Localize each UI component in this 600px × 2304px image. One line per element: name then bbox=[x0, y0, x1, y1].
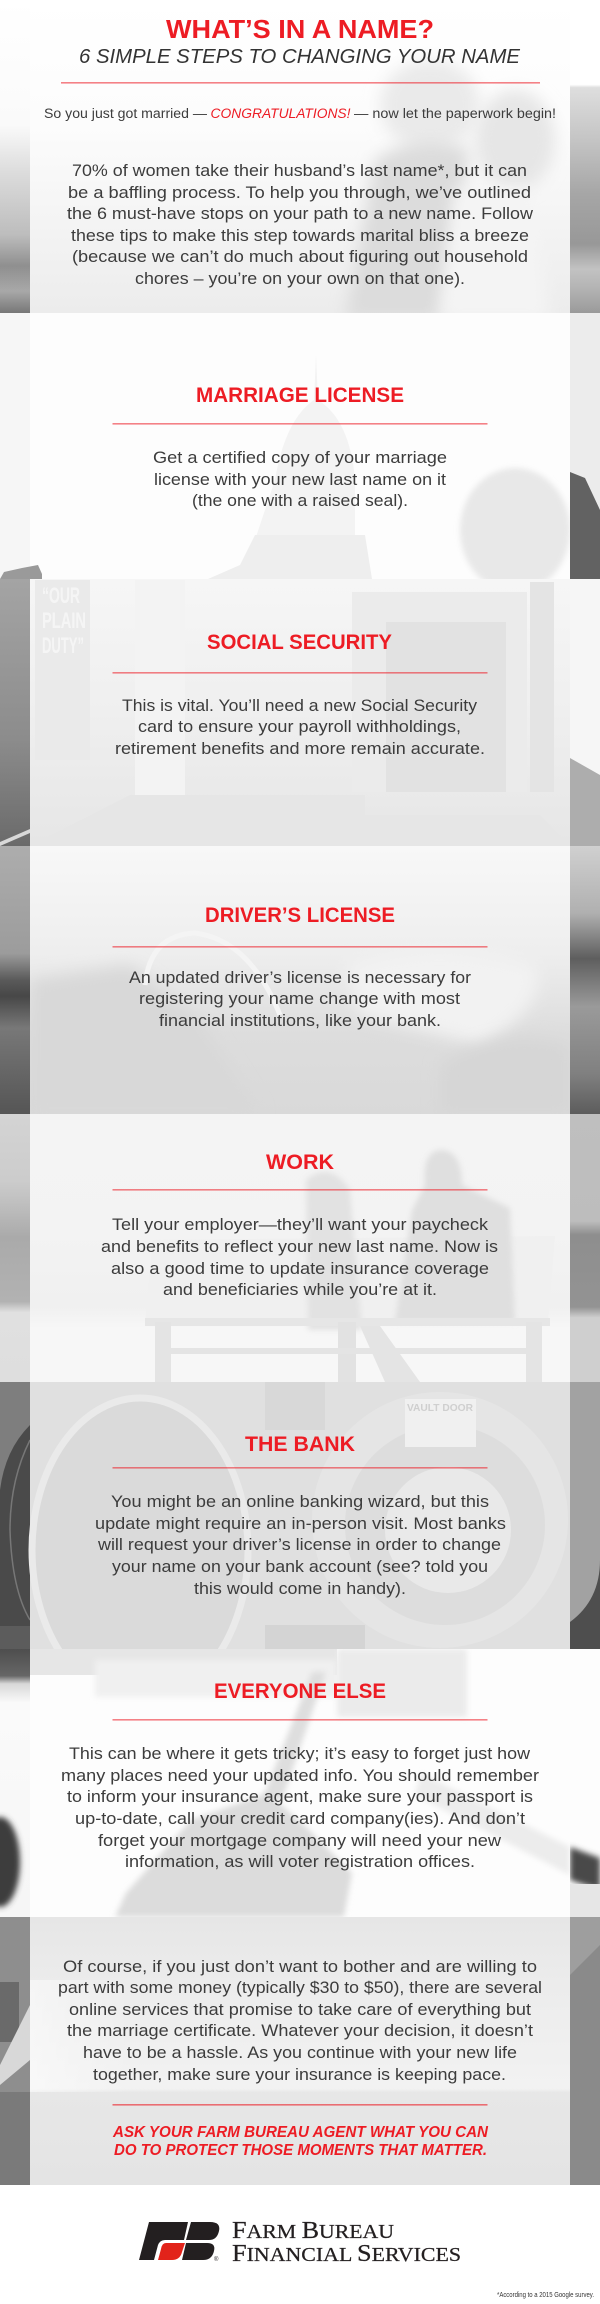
photo: museum interior: PLAIN bbox=[42, 608, 86, 633]
heading: social security: SOCIAL SECURITY bbox=[207, 631, 392, 654]
body: everyone else: forget your mortgage company will need your new bbox=[98, 1831, 502, 1850]
congratulations line: — now let the paperwork begin! bbox=[354, 106, 556, 121]
intro paragraph: be a baffling process. To help you through, we’ve outlined bbox=[68, 183, 531, 202]
panel: introduction bbox=[0, 0, 600, 320]
body: work: and benefits to reflect your new last name. Now is bbox=[101, 1237, 498, 1256]
body: everyone else bbox=[61, 1744, 539, 1871]
photo: bank vault door bbox=[0, 1382, 600, 1649]
body: the bank: your name on your bank account (see? told you bbox=[112, 1557, 488, 1576]
panel: driver's license bbox=[0, 846, 600, 1114]
body: everyone else: This can be where it gets tricky; it’s easy to forget just how bbox=[69, 1744, 531, 1763]
body: the bank bbox=[95, 1492, 506, 1598]
panel: work bbox=[0, 1114, 600, 1382]
body: closing: online services that promise to take care of everything but bbox=[69, 2000, 531, 2019]
body: closing: Of course, if you just don’t want to bother and are willing to bbox=[63, 1957, 537, 1976]
body: closing bbox=[58, 1957, 542, 2084]
body: social security bbox=[116, 699, 484, 754]
congratulations line: So you just got married — bbox=[44, 106, 208, 121]
body: driver's license: financial institutions, like your bank. bbox=[159, 1011, 441, 1030]
photo: church tower bbox=[0, 313, 600, 592]
intro paragraph: chores – you’re on your own on that one). bbox=[135, 269, 465, 288]
body: closing: have to be a hassle. As you continue with your new life bbox=[83, 2043, 517, 2062]
body: the bank: will request your driver’s license in order to change bbox=[97, 1535, 501, 1554]
icon: FB mark bbox=[139, 2222, 219, 2263]
panel: social security bbox=[0, 579, 600, 846]
body: closing: together, make sure your insurance is keeping pace. bbox=[93, 2065, 506, 2084]
body: social security: This is vital. You’ll need a new Social Security bbox=[122, 696, 478, 715]
wordmark: FINANCIAL SERVICES bbox=[232, 2241, 461, 2267]
body: closing: the marriage certificate. Whatever your decision, it doesn’t bbox=[67, 2021, 533, 2040]
call to action bbox=[112, 2126, 488, 2155]
intro paragraph bbox=[67, 161, 534, 288]
vault door plate text: VAULT DOOR bbox=[407, 1402, 473, 1414]
heading: the bank: THE BANK bbox=[245, 1433, 355, 1456]
body: work: also a good time to update insurance coverage bbox=[111, 1259, 489, 1278]
congratulations line: CONGRATULATIONS! bbox=[210, 106, 351, 121]
body: driver's license: An updated driver’s license is necessary for bbox=[129, 968, 471, 987]
photo: hand writing with pen bbox=[0, 1649, 600, 1917]
body: closing: part with some money (typically $30 to $50), there are several bbox=[58, 1978, 542, 1997]
photo: museum interior: “OUR bbox=[42, 583, 80, 608]
photo: museum interior: DUTY” bbox=[42, 633, 84, 658]
panel: everyone else bbox=[0, 1649, 600, 1917]
body: everyone else: many places need your updated info. You should remember bbox=[61, 1766, 539, 1785]
body: social security: retirement benefits and more remain accurate. bbox=[115, 739, 485, 758]
photo: keyboard bbox=[0, 1917, 600, 2185]
call to action: DO TO PROTECT THOSE MOMENTS THAT MATTER. bbox=[114, 2142, 487, 2159]
panel: the bank bbox=[0, 1382, 600, 1649]
body: everyone else: information, as will voter registration offices. bbox=[125, 1852, 475, 1871]
intro paragraph: 70% of women take their husband’s last name*, but it can bbox=[72, 161, 527, 180]
wordmark bbox=[232, 2218, 461, 2267]
body: marriage license bbox=[153, 448, 447, 510]
heading: marriage license: MARRIAGE LICENSE bbox=[196, 384, 404, 407]
body: the bank: this would come in handy). bbox=[194, 1579, 406, 1598]
icon: FB mark: ® bbox=[214, 2256, 219, 2263]
photo: museum interior bbox=[0, 579, 600, 846]
title: WHAT’S IN A NAME? bbox=[166, 14, 434, 44]
body: work: Tell your employer—they’ll want your paycheck bbox=[112, 1215, 489, 1234]
body: work bbox=[101, 1215, 498, 1299]
body: work: and beneficiaries while you’re at it. bbox=[163, 1280, 437, 1299]
call to action: ASK YOUR FARM BUREAU AGENT WHAT YOU CAN bbox=[112, 2124, 489, 2141]
body: marriage license: Get a certified copy of your marriage bbox=[153, 448, 447, 467]
photo: newlywed couple bbox=[0, 57, 600, 313]
panel: closing bbox=[0, 1917, 600, 2185]
subtitle: 6 SIMPLE STEPS TO CHANGING YOUR NAME bbox=[79, 45, 520, 68]
wordmark: FARM BUREAU bbox=[232, 2218, 395, 2244]
congratulations line bbox=[44, 108, 555, 121]
body: driver's license bbox=[129, 968, 471, 1030]
photo: couple on a bench bbox=[0, 1114, 600, 1382]
body: social security: card to ensure your payroll withholdings, bbox=[138, 717, 461, 736]
intro paragraph: the 6 must-have stops on your path to a new name. Follow bbox=[67, 204, 534, 223]
body: marriage license: (the one with a raised seal). bbox=[192, 491, 408, 510]
body: everyone else: up-to-date, call your credit card company(ies). And don’t bbox=[75, 1809, 525, 1828]
intro paragraph: (because we can’t do much about figuring out household bbox=[72, 247, 528, 266]
photo: steering wheel bbox=[0, 846, 600, 1114]
heading: everyone else: EVERYONE ELSE bbox=[214, 1680, 386, 1703]
body: the bank: update might require an in-person visit. Most banks bbox=[95, 1514, 506, 1533]
body: driver's license: registering your name change with most bbox=[139, 989, 460, 1008]
body: everyone else: to inform your insurance agent, make sure your passport is bbox=[67, 1787, 533, 1806]
intro paragraph: these tips to make this step towards marital bliss a breeze bbox=[71, 226, 529, 245]
logo: Farm Bureau Financial Services bbox=[139, 2218, 461, 2267]
panel: marriage license bbox=[0, 313, 600, 592]
body: the bank: You might be an online banking wizard, but this bbox=[111, 1492, 489, 1511]
body: marriage license: license with your new last name on it bbox=[154, 470, 446, 489]
heading: work: WORK bbox=[266, 1151, 334, 1174]
heading: driver's license: DRIVER’S LICENSE bbox=[205, 904, 395, 927]
